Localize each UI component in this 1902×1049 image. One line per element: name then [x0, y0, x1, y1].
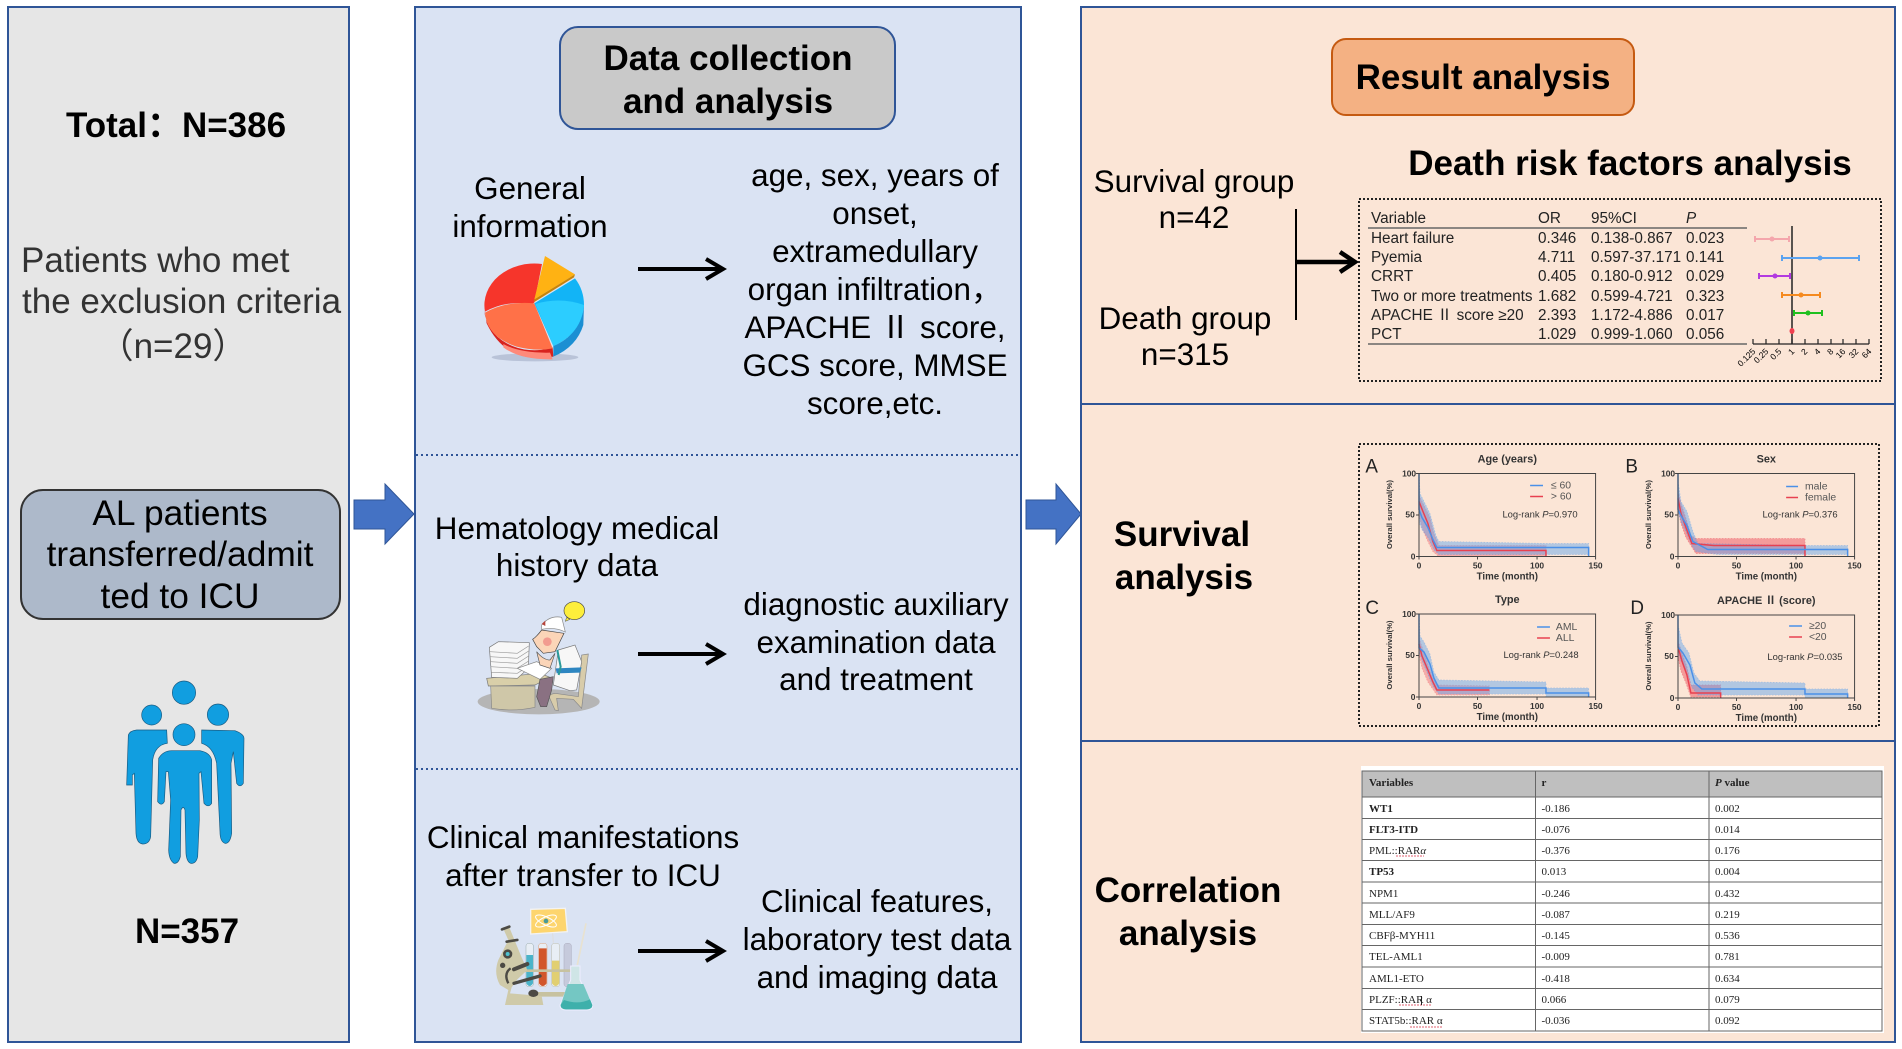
chart C: type: 50: [1405, 650, 1415, 660]
chart B: sex: 150: [1848, 560, 1862, 571]
chart C: type: 0: [1417, 701, 1422, 711]
arrow: data collection to results: [1026, 484, 1081, 544]
exclusion criteria text: [21, 241, 342, 366]
AL patients box: transferred/admit: [47, 535, 314, 574]
chart C: type: Log-rank P=0.248: [1503, 650, 1579, 661]
label: survival analysis: Survival: [1114, 515, 1250, 554]
chart B: sex: Time (month): [1736, 571, 1797, 583]
text: clinical data: Clinical features,: [761, 884, 993, 919]
correlation table: -0.009: [1542, 951, 1570, 963]
label: clinical manifestations: Clinical manifestations: [427, 820, 739, 855]
icon: doctor at desk: [478, 602, 600, 714]
chart D: APACHE II: <20: [1809, 632, 1827, 643]
chart C: type: 100: [1530, 701, 1544, 711]
chart A: age: 50: [1473, 560, 1483, 571]
heading: result analysis: [1332, 39, 1634, 115]
forest plot table: 0.597-37.171: [1591, 249, 1681, 266]
chart A: age: A: [1365, 456, 1378, 478]
heading: data collection and analysis: and analysis: [623, 82, 833, 121]
correlation table: 0.781: [1715, 951, 1740, 963]
forest plot table: 1.682: [1538, 288, 1576, 305]
chart C: type: Time (month): [1477, 712, 1538, 723]
correlation table: -0.418: [1542, 973, 1570, 985]
chart B: sex: 0: [1676, 560, 1681, 571]
correlation table: STAT5b::RAR α: [1369, 1015, 1443, 1027]
survival and death groups: Survival group: [1094, 164, 1294, 199]
chart D: APACHE II: Overall survival(%): [1644, 621, 1653, 691]
total count: Total：N=386: [66, 106, 286, 145]
correlation table: 0.079: [1715, 994, 1740, 1006]
survival and death groups: n=42: [1159, 200, 1229, 235]
correlation table: 0.002: [1715, 803, 1740, 815]
correlation table: 0.092: [1715, 1015, 1740, 1027]
label: survival analysis: analysis: [1115, 558, 1253, 597]
chart A: age: 150: [1589, 560, 1603, 571]
label: correlation analysis: analysis: [1119, 914, 1257, 953]
forest plot table: 1.172-4.886: [1591, 307, 1673, 324]
forest plot chart: 8: [1825, 346, 1836, 357]
exclusion criteria text: the exclusion criteria: [22, 282, 342, 321]
forest plot table: P: [1686, 210, 1697, 227]
chart A: age: 0: [1417, 560, 1422, 571]
forest plot table: 0.323: [1686, 288, 1724, 305]
label: clinical manifestations: [427, 820, 739, 893]
text: general variables: score,etc.: [807, 386, 943, 421]
chart A: age: 100: [1530, 560, 1544, 571]
label: general information: General: [474, 171, 586, 206]
chart B: sex: Overall survival(%): [1644, 479, 1653, 549]
heading: death risk factors: Death risk factors analysis: [1408, 144, 1852, 183]
forest plot chart: 2: [1799, 346, 1810, 357]
exclusion criteria text: （n=29）: [99, 327, 247, 366]
forest plot table: 0.599-4.721: [1591, 288, 1673, 305]
text: general variables: organ infiltration，: [748, 272, 1002, 307]
AL patients box: AL patients: [92, 494, 268, 533]
chart B: sex: female: [1805, 492, 1836, 504]
forest plot table: PCT: [1371, 326, 1402, 343]
chart D: APACHE II: 150: [1848, 702, 1862, 712]
label: survival analysis: [1114, 515, 1253, 597]
correlation table: 0.066: [1542, 994, 1567, 1006]
correlation table: FLT3-ITD: [1369, 824, 1418, 836]
chart B: sex: 0: [1670, 551, 1675, 562]
forest plot table: 1.029: [1538, 326, 1576, 343]
chart A: age: Time (month): [1477, 571, 1538, 583]
chart D: APACHE II: 50: [1732, 702, 1742, 712]
text: general variables: age, sex, years of: [751, 158, 999, 193]
correlation table: CBFβ-MYH11: [1369, 930, 1435, 942]
correlation table: 0.634: [1715, 973, 1740, 985]
chart B: sex: male: [1805, 481, 1828, 493]
correlation table: TP53: [1369, 866, 1395, 878]
text: clinical data: [743, 884, 1012, 995]
forest plot table: OR: [1538, 210, 1561, 227]
chart C: type: 0: [1411, 692, 1416, 702]
chart D: APACHE II: ≥20: [1809, 621, 1826, 632]
exclusion criteria text: Patients who met: [21, 241, 290, 280]
chart D: APACHE II: 0: [1676, 702, 1681, 712]
chart A: age: > 60: [1551, 491, 1572, 503]
correlation table: NPM1: [1369, 888, 1398, 900]
label: hematology medical history: Hematology medical: [435, 511, 719, 546]
forest plot table: 0.346: [1538, 230, 1576, 247]
text: diagnostic data: [743, 587, 1009, 697]
forest plot chart: [1735, 226, 1874, 368]
text: general variables: [742, 158, 1008, 421]
chart B: sex: Log-rank P=0.376: [1762, 509, 1838, 521]
chart C: type: Overall survival(%): [1385, 620, 1394, 690]
chart C: type: AML: [1556, 622, 1577, 633]
panel: patient selection: [8, 7, 349, 1042]
forest plot table: 0.405: [1538, 268, 1576, 285]
correlation table: TEL-AML1: [1369, 951, 1423, 963]
chart C: type: 50: [1473, 701, 1483, 711]
chart A: age: Log-rank P=0.970: [1502, 509, 1578, 521]
panel: result analysis: [1081, 7, 1895, 1042]
chart D: APACHE II: D: [1630, 598, 1644, 619]
forest plot table: 0.017: [1686, 307, 1724, 324]
label: hematology medical history: [435, 511, 719, 583]
correlation table: P value: [1715, 777, 1750, 789]
chart B: sex: 100: [1789, 560, 1803, 571]
arrow: selection to data collection: [354, 484, 414, 544]
forest plot table: APACHE Ⅱ score ≥20: [1371, 307, 1524, 324]
label: clinical manifestations: after transfer to ICU: [445, 858, 721, 893]
chart B: sex: 100: [1661, 468, 1675, 479]
forest plot chart: 0.125: [1735, 346, 1758, 368]
correlation table: Variables: [1369, 777, 1414, 789]
correlation table: -0.036: [1542, 1015, 1570, 1027]
correlation table: -0.186: [1542, 803, 1570, 815]
final count: N=357: [135, 912, 239, 951]
correlation table: 0.432: [1715, 888, 1740, 900]
forest plot table: Pyemia: [1371, 249, 1422, 266]
chart C: type: ALL: [1556, 633, 1575, 644]
text: general variables: APACHE Ⅱ score,: [744, 310, 1006, 345]
correlation table: PLZF::RAR α: [1369, 994, 1432, 1006]
forest plot table: Heart failure: [1371, 230, 1454, 247]
chart C: type: 150: [1589, 701, 1603, 711]
forest plot table: Variable: [1371, 210, 1426, 227]
forest plot table: 0.056: [1686, 326, 1724, 343]
correlation table: PML::RARα: [1369, 845, 1426, 857]
chart D: APACHE II: Log-rank P=0.035: [1767, 652, 1843, 663]
correlation table: WT1: [1369, 803, 1393, 815]
forest plot table: 0.999-1.060: [1591, 326, 1673, 343]
text: general variables: extramedullary: [772, 234, 978, 269]
chart C: type: Type: [1495, 594, 1520, 606]
survival and death groups: Death group: [1099, 301, 1271, 336]
chart A: age: Age (years): [1478, 453, 1537, 466]
text: general variables: GCS score, MMSE: [742, 348, 1008, 383]
correlation table: MLL/AF9: [1369, 909, 1415, 921]
chart D: APACHE II: Time (month): [1736, 713, 1797, 724]
chart B: sex: [1625, 453, 1862, 583]
text: diagnostic data: diagnostic auxiliary: [743, 587, 1009, 622]
arrow: hematology: [638, 644, 723, 664]
label: correlation analysis: [1095, 871, 1281, 953]
survival and death groups: [1094, 164, 1294, 372]
forest plot table: CRRT: [1371, 268, 1413, 285]
arrow: clinical: [638, 941, 723, 961]
forest plot chart: 4: [1812, 346, 1823, 357]
correlation table: -0.087: [1542, 909, 1570, 921]
label: hematology medical history: history data: [496, 548, 659, 583]
forest plot table: [1359, 199, 1881, 381]
AL patients box: [21, 490, 340, 619]
forest plot table: 4.711: [1538, 249, 1575, 266]
chart D: APACHE II: 100: [1661, 610, 1675, 620]
chart B: sex: B: [1625, 456, 1638, 478]
AL patients box: ted to ICU: [101, 577, 259, 616]
survival curves figure: [1359, 444, 1879, 726]
chart D: APACHE II: 100: [1789, 702, 1803, 712]
correlation table: 0.004: [1715, 866, 1740, 878]
chart B: sex: 50: [1732, 560, 1742, 571]
forest plot chart: 16: [1834, 346, 1848, 360]
arrow: general information: [638, 259, 723, 279]
chart A: age: ≤ 60: [1551, 480, 1571, 492]
forest plot chart: 0.25: [1752, 346, 1771, 365]
chart C: type: [1365, 594, 1603, 723]
correlation table: 0.176: [1715, 845, 1740, 857]
chart A: age: 0: [1411, 551, 1416, 562]
correlation table: -0.376: [1542, 845, 1570, 857]
correlation table: [1361, 766, 1884, 1033]
correlation table: r: [1542, 777, 1546, 789]
heading: data collection and analysis: [560, 27, 895, 129]
correlation table: 0.536: [1715, 930, 1740, 942]
correlation table: 0.014: [1715, 824, 1740, 836]
chart A: age: [1365, 453, 1603, 583]
correlation table: -0.246: [1542, 888, 1570, 900]
chart D: APACHE II: 0: [1670, 693, 1675, 703]
forest plot chart: 64: [1860, 346, 1874, 360]
chart D: APACHE II: APACHE Ⅱ (score): [1717, 595, 1816, 607]
text: general variables: onset,: [832, 196, 918, 231]
icon: 3D pie chart: [484, 256, 584, 361]
correlation table: AML1-ETO: [1369, 973, 1424, 985]
text: diagnostic data: examination data: [756, 625, 996, 660]
text: clinical data: laboratory test data: [743, 922, 1012, 957]
forest plot table: 0.141: [1686, 249, 1724, 266]
correlation table: 0.219: [1715, 909, 1740, 921]
chart A: age: 100: [1402, 468, 1416, 479]
forest plot table: 0.029: [1686, 268, 1724, 285]
icon: group of people: [127, 681, 244, 863]
forest plot table: 0.138-0.867: [1591, 230, 1673, 247]
text: diagnostic data: and treatment: [779, 662, 973, 697]
forest plot table: 95%CI: [1591, 210, 1637, 227]
chart B: sex: 50: [1664, 509, 1674, 520]
correlation table: 0.013: [1542, 866, 1567, 878]
label: general information: information: [452, 209, 608, 244]
chart D: APACHE II: 50: [1664, 651, 1674, 661]
label: correlation analysis: Correlation: [1095, 871, 1281, 910]
forest plot table: 0.180-0.912: [1591, 268, 1673, 285]
chart D: APACHE II: [1630, 595, 1862, 724]
correlation table: -0.145: [1542, 930, 1570, 942]
forest plot chart: 32: [1847, 346, 1861, 360]
survival and death groups: n=315: [1141, 337, 1229, 372]
heading: result analysis: Result analysis: [1356, 58, 1610, 97]
forest plot table: 2.393: [1538, 307, 1576, 324]
chart B: sex: Sex: [1757, 453, 1776, 466]
chart A: age: 50: [1405, 509, 1415, 520]
chart A: age: Overall survival(%): [1385, 479, 1394, 549]
forest plot chart: 0.5: [1768, 346, 1784, 362]
heading: data collection and analysis: Data collection: [604, 39, 852, 78]
correlation table: -0.076: [1542, 824, 1570, 836]
label: general information: [452, 171, 608, 244]
text: clinical data: and imaging data: [757, 960, 998, 995]
panel: data collection and analysis: [415, 7, 1021, 1042]
icon: microscope and flask: [496, 908, 593, 1010]
forest plot table: 0.023: [1686, 230, 1724, 247]
chart C: type: 100: [1402, 609, 1416, 619]
forest plot table: Two or more treatments: [1371, 288, 1533, 305]
forest plot chart: 1: [1786, 346, 1797, 357]
arrow: groups to forest plot: [1296, 209, 1355, 320]
chart C: type: C: [1365, 598, 1379, 619]
